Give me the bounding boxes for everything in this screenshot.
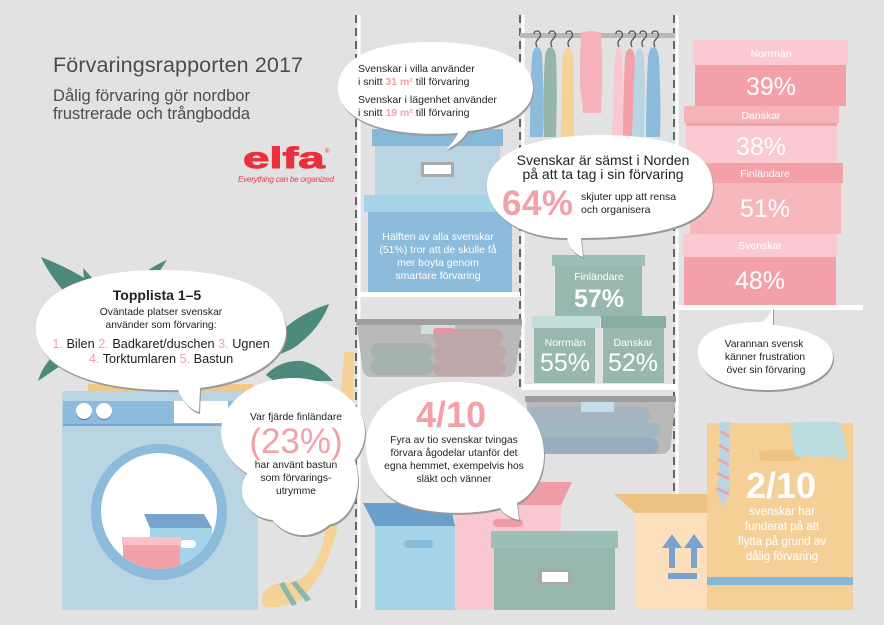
speech bubble: 64%: och organisera (581, 204, 651, 216)
subtitle (53, 87, 251, 123)
stack box: Svenskar 48% (683, 234, 837, 305)
box: smarter storage: smartare förvaring (395, 270, 481, 282)
shelf (524, 384, 676, 390)
cloud bubble: 23% (221, 378, 365, 535)
cloud bubble: 23%: Var fjärde finländare (250, 412, 342, 423)
speech bubble: square metres (338, 42, 533, 149)
speech bubble: top list (36, 270, 286, 412)
stack box: Danskar 38%: Danskar (741, 110, 781, 122)
speech bubble: square metres: i snitt 19 m² till förvaring (358, 107, 470, 119)
stack box: Finländare 51% (690, 163, 843, 234)
shelf (675, 305, 863, 310)
box: Norrmän 55%: Norrmän (545, 337, 586, 349)
box: Finländare 57%: 57% (574, 285, 624, 313)
speech bubble: 64% (487, 135, 713, 257)
speech bubble: 4/10: egna hemmet, exempelvis hos (384, 461, 524, 472)
box: Norrmän 55%: 55% (540, 349, 590, 377)
large cardboard box: funderat på att (745, 521, 820, 533)
box: Danskar 52%: 52% (608, 349, 658, 377)
box with label (372, 129, 503, 198)
logo: elfa: Everything can be organized (238, 174, 334, 184)
speech bubble: top list: 1. Bilen 2. Badkaret/duschen 3. Ugnen (52, 337, 270, 351)
speech bubble: 4/10: förvara ågodelar utanför det (390, 447, 518, 459)
shelf rails (356, 15, 677, 610)
speech bubble: frustration (698, 306, 833, 390)
box: smarter storage: mer boyta genom (397, 257, 479, 269)
speech bubble: frustration: över sin förvaring (727, 365, 806, 376)
stack box: Norrmän 39%: Norrmän (751, 48, 792, 60)
box: Danskar 52%: Danskar (613, 337, 653, 349)
large cardboard box: svenskar har (749, 506, 815, 518)
icon: this side up arrows (662, 534, 704, 579)
box: Finländare 57%: Finländare (574, 271, 624, 283)
speech bubble: top list: använder som förvaring: (105, 320, 217, 331)
title: Förvaringsrapporten 2017 (53, 53, 303, 77)
box: Norrmän 55% (532, 316, 600, 383)
stack box: Finländare 51%: 51% (740, 195, 790, 223)
box: smarter storage: (51%) tror att de skulle få (379, 244, 497, 256)
speech bubble: 64%: 64% (502, 184, 573, 223)
cloud bubble: 23%: som förvarings- (261, 473, 331, 484)
cloud bubble: 23%: har använt bastun (255, 460, 337, 471)
stack box: Svenskar 48%: Svenskar (738, 240, 782, 252)
stack box: Norrmän 39%: 39% (746, 73, 796, 101)
cloud bubble: 23%: (23%) (249, 422, 343, 461)
speech bubble: top list: Oväntade platser svenskar (100, 307, 223, 318)
storage tray with blankets (525, 396, 676, 454)
logo: elfa (238, 142, 334, 184)
clothes rail with hanging clothes (520, 31, 675, 137)
speech bubble: frustration: Varannan svensk (725, 339, 804, 350)
subtitle: frustrerade och trångbodda (53, 105, 251, 123)
large cardboard box: 2/10 (746, 465, 816, 506)
box: Danskar 52% (601, 316, 666, 383)
hockey stick (262, 352, 354, 607)
scarf (791, 421, 847, 459)
washing machine (62, 391, 258, 610)
box: Finländare 57% (552, 255, 645, 317)
stack box: Norrmän 39% (693, 40, 848, 106)
logo: elfa: elfa (243, 142, 326, 175)
speech bubble: 4/10 (366, 382, 544, 520)
speech bubble: top list: 4. Torktumlaren 5. Bastun (89, 352, 233, 366)
speech bubble: square metres: i snitt 31 m² till förvaring (358, 76, 470, 88)
speech bubble: 4/10: Fyra av tio svenskar tvingas (390, 435, 518, 446)
icon: tie (716, 422, 730, 506)
box: smarter storage (364, 195, 514, 292)
speech bubble: 64%: på att ta tag i sin förvaring (522, 166, 684, 182)
speech bubble: square metres: Svenskar i lägenhet använder (358, 94, 497, 106)
speech bubble: 4/10: släkt och vänner (417, 474, 492, 485)
subtitle: Dålig förvaring gör nordbor (53, 87, 250, 105)
large cardboard box (707, 421, 853, 610)
large cardboard box: flytta på grund av (738, 536, 826, 548)
speech bubble: frustration: känner frustration (725, 352, 805, 363)
green box (491, 531, 618, 610)
stick tape (279, 581, 311, 606)
logo: elfa: ® (325, 148, 330, 155)
stack box: Danskar 38% (684, 106, 839, 165)
box: smarter storage: Hälften av alla svenskar (382, 231, 494, 243)
stand behind washing machine (88, 384, 253, 391)
storage tray with towels (356, 319, 522, 377)
stack box: Danskar 38%: 38% (736, 133, 786, 161)
pink box (455, 482, 572, 610)
open cardboard box (614, 494, 707, 610)
speech bubble: top list: Topplista 1–5 (113, 287, 201, 303)
speech bubble: square metres: Svenskar i villa använder (358, 63, 475, 75)
speech bubble: 64%: Svenskar är sämst i Norden (517, 152, 689, 168)
blue box (363, 503, 455, 610)
speech bubble: 4/10: 4/10 (416, 394, 486, 435)
large cardboard box: dålig förvaring (746, 551, 818, 563)
stack box: Svenskar 48%: 48% (735, 267, 785, 295)
stack box: Finländare 51%: Finländare (740, 168, 790, 180)
speech bubble: 64%: skjuter upp att rensa (581, 191, 676, 203)
shelf (358, 292, 520, 297)
cloud bubble: 23%: utrymme (276, 486, 316, 497)
plant leaves (38, 257, 333, 385)
